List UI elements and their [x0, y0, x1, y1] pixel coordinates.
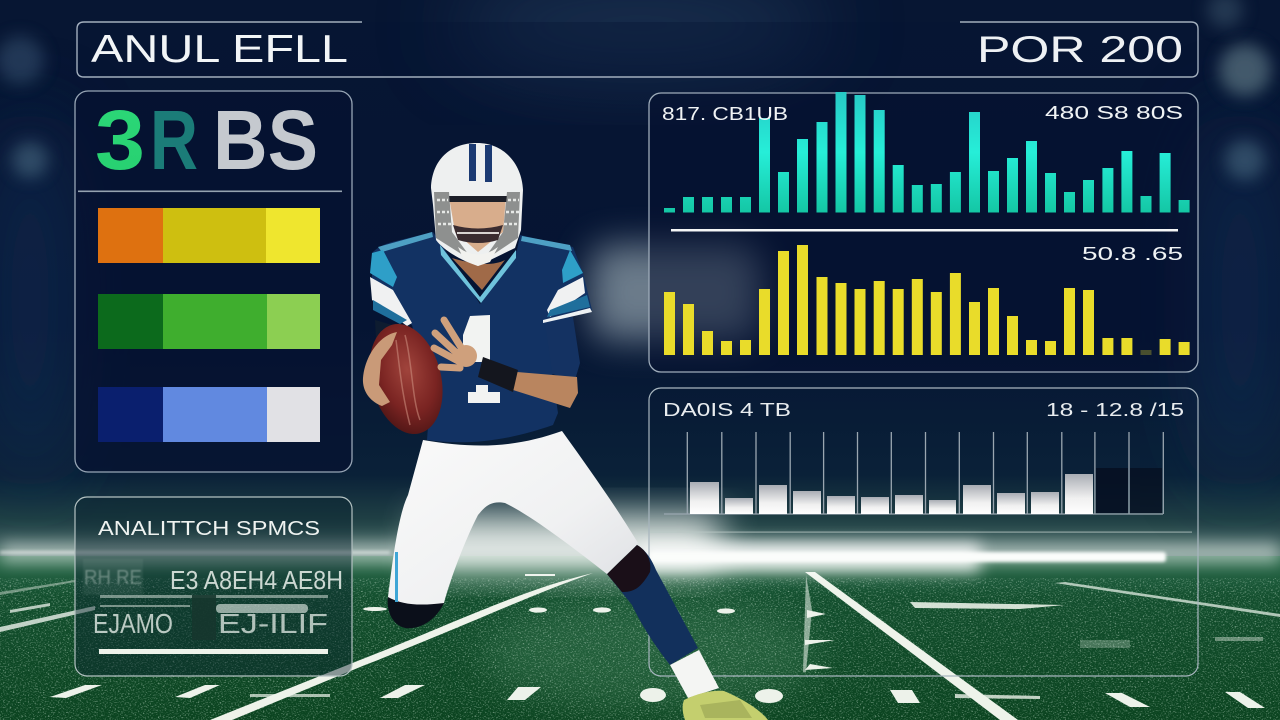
chart divider	[671, 229, 1178, 232]
header title left: ANUL EFLL	[91, 28, 348, 71]
panel: analytics stats	[75, 497, 352, 676]
pants	[388, 431, 638, 605]
teal chart label left: 817. CB1UB	[662, 104, 788, 124]
stats text row two right: EJ-ILIF	[218, 608, 328, 639]
panel: score and color swatches	[75, 91, 352, 472]
panel: white bar chart	[649, 388, 1198, 676]
football	[358, 316, 454, 442]
swatch row: green	[98, 294, 320, 349]
teal bar chart	[664, 92, 1190, 212]
panel heading: ANALITTCH SPMCS	[98, 518, 320, 540]
shoulder trim	[378, 232, 572, 252]
faint table block: RH RE	[84, 567, 142, 589]
white bar chart	[664, 432, 1163, 514]
white sock	[670, 650, 719, 698]
quarterback player	[358, 143, 768, 720]
score heading: BS	[213, 93, 318, 187]
yellow bar chart	[664, 245, 1190, 355]
right leg sock	[607, 545, 698, 665]
white chart label right: 18 - 12.8 /15	[1046, 400, 1184, 420]
face	[449, 197, 506, 252]
yellow chart label: 50.8 .65	[1082, 244, 1183, 264]
horizon glow	[0, 515, 1280, 572]
teal chart label right: 480 S8 80S	[1045, 103, 1183, 123]
header bar	[77, 22, 1198, 77]
right sleeve stripes	[562, 250, 583, 283]
stats text row two left: EJAMO	[93, 608, 173, 639]
cleat	[683, 691, 768, 720]
white chart label left: DA0IS 4 TB	[663, 400, 791, 420]
jersey collar	[440, 245, 516, 303]
right arm sleeve	[517, 317, 580, 380]
swatch row: orange yellow	[98, 208, 320, 263]
faint table block	[83, 559, 143, 595]
left hand	[363, 332, 397, 406]
forearm	[513, 372, 578, 408]
football field	[0, 556, 1280, 720]
sideline left	[210, 573, 593, 720]
swatch row: blue grey	[98, 387, 320, 442]
left sleeve stripes	[370, 250, 397, 287]
jersey	[372, 232, 592, 442]
wristband	[478, 357, 518, 392]
stats rule	[99, 649, 328, 654]
jersey number	[463, 315, 500, 403]
score heading: 3	[95, 93, 145, 187]
facemask	[434, 192, 520, 262]
helmet	[431, 143, 523, 266]
header title right: POR 200	[977, 29, 1183, 70]
right hand	[434, 320, 477, 368]
score heading	[95, 93, 318, 187]
yard hash marks	[50, 574, 1265, 708]
left leg knee	[388, 597, 444, 628]
panel: teal and yellow bar charts	[649, 92, 1198, 372]
stats text row one: E3 A8EH4 AE8H	[170, 565, 343, 595]
score heading: R	[150, 93, 198, 187]
left arm sleeve	[375, 320, 410, 350]
